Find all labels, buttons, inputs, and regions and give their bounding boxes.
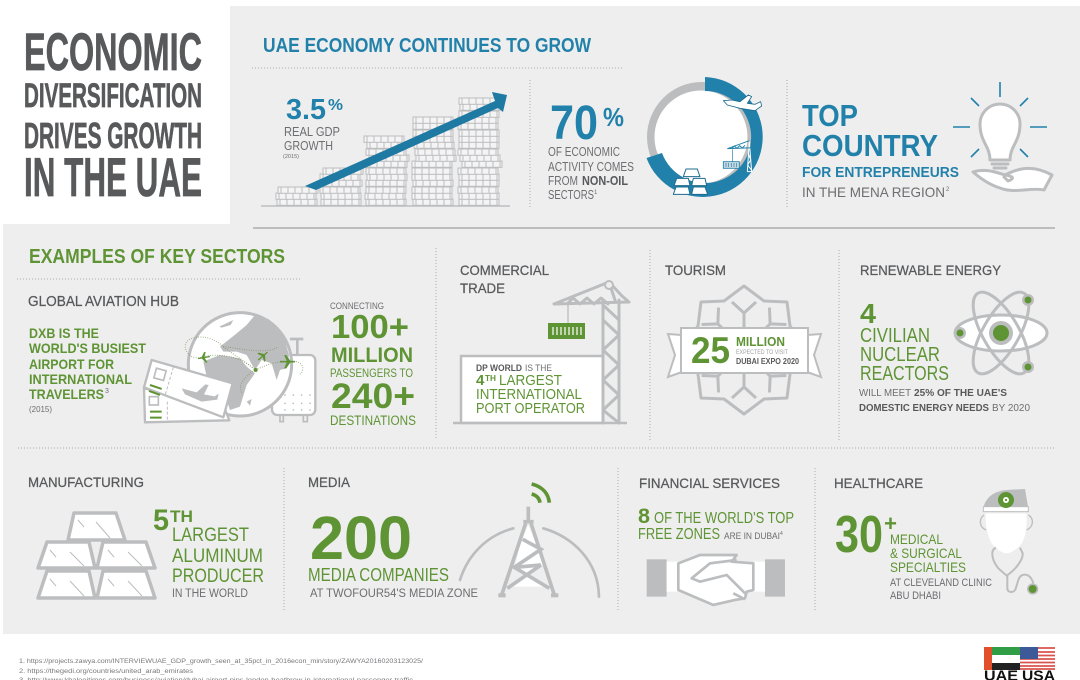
text: free zones: 8 [638, 505, 650, 528]
text: 30+ specialties: 30 [835, 506, 883, 564]
text: DP World: 4 [476, 372, 485, 389]
text: free zones [638, 505, 794, 543]
panel: commercial trade [453, 262, 629, 423]
panel: renewable energy: RENEWABLE ENERGY [860, 262, 1002, 278]
stat: top country for entrepreneurs [802, 98, 959, 200]
stat: top country for entrepreneurs: 2 [946, 187, 950, 193]
stat: 3.5% real GDP growth: 3.5 [286, 94, 326, 126]
text: civilian nuclear reactors: NUCLEAR [860, 344, 940, 366]
stat: 70% non-oil: FROM [548, 173, 578, 188]
text: DP World: LARGEST [499, 372, 562, 389]
stat: 70% non-oil: SECTORS [548, 187, 594, 202]
text: connecting passengers: CONNECTING [330, 301, 384, 312]
heading: UAE economy continues to grow: UAE ECONOMY CONTINUES TO GROW [263, 35, 591, 57]
icon: broadcast tower [460, 484, 599, 597]
title: DIVERSIFICATION [24, 77, 202, 115]
text: civilian nuclear reactors: 4 [860, 298, 876, 329]
text: DXB busiest airport: 3 [105, 388, 109, 395]
text: DP World: DP WORLD [476, 363, 522, 374]
footnotes [19, 658, 423, 680]
text: 5th largest aluminum producer: 5 [153, 504, 169, 537]
text: DXB busiest airport: DXB IS THE [29, 325, 99, 341]
text: connecting passengers: 240+ [331, 377, 415, 416]
text: free zones: ARE IN DUBAI [724, 531, 780, 542]
stat: 70% non-oil: 1 [594, 190, 598, 196]
panel: top economy background [230, 6, 1080, 225]
text: DP World: TH [485, 373, 496, 383]
text: 5th largest aluminum producer: ALUMINUM [172, 546, 263, 567]
text: DP World: INTERNATIONAL [476, 386, 582, 403]
stat: 70% non-oil [548, 97, 634, 202]
text: 30+ specialties: AT CLEVELAND CLINIC [890, 577, 992, 589]
text: DP World: PORT OPERATOR [476, 400, 585, 417]
text: DXB busiest airport: INTERNATIONAL [29, 371, 132, 387]
stat: top country for entrepreneurs: TOP [802, 98, 858, 133]
text: 200 media companies: 200 [310, 504, 412, 572]
text: civilian nuclear reactors: CIVILIAN [860, 325, 930, 347]
icon: boarding passes [144, 360, 233, 422]
panel: global aviation hub [28, 294, 416, 428]
icon: crane with container [453, 281, 629, 423]
icon: atom [954, 284, 1047, 382]
text: connecting passengers: PASSENGERS TO [330, 366, 413, 380]
panel: tourism: TOURISM [665, 262, 726, 278]
text: 30+ specialties: & SURGICAL [890, 545, 962, 561]
text: 25 million [691, 330, 799, 371]
text: 25 million: MILLION [736, 334, 785, 349]
text: DXB busiest airport: WORLD'S BUSIEST [29, 340, 146, 356]
icon: ingots [673, 169, 708, 194]
text: 25 million: EXPECTED TO VISIT [736, 349, 788, 356]
icon: handshake [647, 555, 785, 605]
panel: global aviation hub: GLOBAL AVIATION HUB [28, 294, 179, 310]
text: DXB busiest airport: AIRPORT FOR [29, 356, 114, 372]
panel: healthcare: HEALTHCARE [834, 475, 923, 491]
text: free zones: OF THE WORLD'S TOP [654, 510, 794, 527]
panel: commercial trade: COMMERCIAL [460, 262, 549, 278]
title: IN THE UAE [24, 146, 202, 208]
text: civilian nuclear reactors: REACTORS [860, 363, 949, 385]
text: DP World: IS THE [525, 363, 552, 374]
text: free zones: FREE ZONES [638, 526, 720, 543]
text: 5th largest aluminum producer: IN THE WORLD [172, 588, 248, 600]
stat: top country for entrepreneurs: FOR ENTREPRENEURS [802, 165, 959, 181]
logo: UAE USA [984, 647, 1056, 680]
icon: plane [723, 95, 762, 111]
ribbon banner [668, 328, 821, 377]
text: 30+ specialties: + [884, 511, 897, 536]
stat: 70% non-oil: % [603, 102, 624, 132]
text: DXB busiest airport [29, 325, 146, 414]
panel: renewable energy [859, 262, 1047, 414]
stat: 3.5% real GDP growth: % [328, 97, 343, 114]
stat: 3.5% real GDP growth: GROWTH [284, 138, 333, 153]
text: 200 media companies [308, 504, 478, 600]
icon: light bulb over hand [953, 82, 1052, 191]
panel: healthcare [834, 475, 1038, 602]
title: DRIVES GROWTH [24, 115, 202, 156]
panel: sectors background [3, 224, 1080, 634]
text: 200 media companies: MEDIA COMPANIES [308, 565, 449, 585]
heading: examples of key sectors: EXAMPLES OF KEY SECTORS [29, 246, 285, 268]
text: 30+ specialties: ABU DHABI [890, 590, 941, 602]
stat: 70% non-oil: 70 [550, 97, 598, 150]
stat: top country for entrepreneurs: IN THE MENA REGION [802, 184, 945, 200]
text: connecting passengers: DESTINATIONS [330, 413, 416, 428]
text: 5th largest aluminum producer [153, 504, 264, 600]
icon: doctor with stethoscope [980, 489, 1038, 595]
text: DXB busiest airport: (2015) [29, 405, 52, 414]
footnotes: 2. https://thegedi.org/countries/united_arab_emirates [19, 668, 194, 675]
stat: top country for entrepreneurs: COUNTRY [802, 128, 938, 163]
panel: financial services [638, 475, 794, 605]
text: civilian nuclear reactors [859, 298, 1030, 414]
stat: 70% non-oil: ACTIVITY COMES [548, 159, 634, 174]
panel: financial services: FINANCIAL SERVICES [639, 475, 780, 491]
stat: 70% non-oil: OF ECONOMIC [548, 144, 620, 159]
icon: crane [723, 141, 757, 172]
panel: media [308, 474, 599, 600]
panel: tourism [665, 262, 821, 414]
stat: 3.5% real GDP growth: REAL GDP [284, 124, 340, 139]
text: civilian nuclear reactors: WILL MEET [859, 387, 912, 399]
text: DXB busiest airport: TRAVELERS [29, 386, 104, 402]
text: civilian nuclear reactors: 25% OF THE UAE'S [914, 387, 1007, 399]
stat: 70% non-oil: NON-OIL [582, 173, 628, 188]
title: ECONOMIC [24, 23, 202, 82]
text: civilian nuclear reactors: DOMESTIC ENERGY NEEDS [859, 402, 989, 414]
panel: commercial trade: TRADE [460, 280, 505, 296]
text: 25 million: DUBAI EXPO 2020 [736, 357, 799, 366]
text: civilian nuclear reactors: BY 2020 [992, 402, 1030, 414]
text: free zones: 4 [780, 531, 783, 537]
panel: media: MEDIA [308, 474, 351, 490]
text: 30+ specialties: MEDICAL [890, 531, 943, 547]
text: 25 million: 25 [691, 330, 730, 371]
panel: manufacturing [28, 474, 264, 600]
icon: aluminum ingots [38, 513, 155, 598]
chart: donut with sector icons [646, 77, 763, 197]
text: 30+ specialties [835, 506, 992, 602]
text: 5th largest aluminum producer: PRODUCER [172, 566, 264, 587]
text: 30+ specialties: SPECIALTIES [890, 559, 966, 575]
panel: manufacturing: MANUFACTURING [28, 474, 144, 490]
text: DP World [476, 363, 585, 417]
icon: suitcase [272, 339, 315, 422]
icon: globe with flight routes [185, 313, 303, 416]
text: 5th largest aluminum producer: LARGEST [172, 525, 249, 546]
footnotes: 1. https://projects.zawya.com/INTERVIEWUAE_GDP_growth_seen_at_35pct_in_2016econ_min/story/ZAWYA20160203123025/ [19, 658, 423, 665]
title [24, 23, 202, 208]
stat: 3.5% real GDP growth: (2015) [283, 154, 299, 160]
icon: geometric star [680, 286, 808, 414]
text: connecting passengers: MILLION [331, 344, 413, 367]
text: connecting passengers [330, 301, 416, 428]
text: 5th largest aluminum producer: TH [170, 507, 193, 526]
chart: coin stacks with rising arrow [261, 92, 510, 206]
text: connecting passengers: 100+ [331, 308, 409, 345]
stat: 3.5% real GDP growth [283, 94, 343, 160]
text: 200 media companies: AT TWOFOUR54'S MEDIA ZONE [310, 588, 478, 600]
